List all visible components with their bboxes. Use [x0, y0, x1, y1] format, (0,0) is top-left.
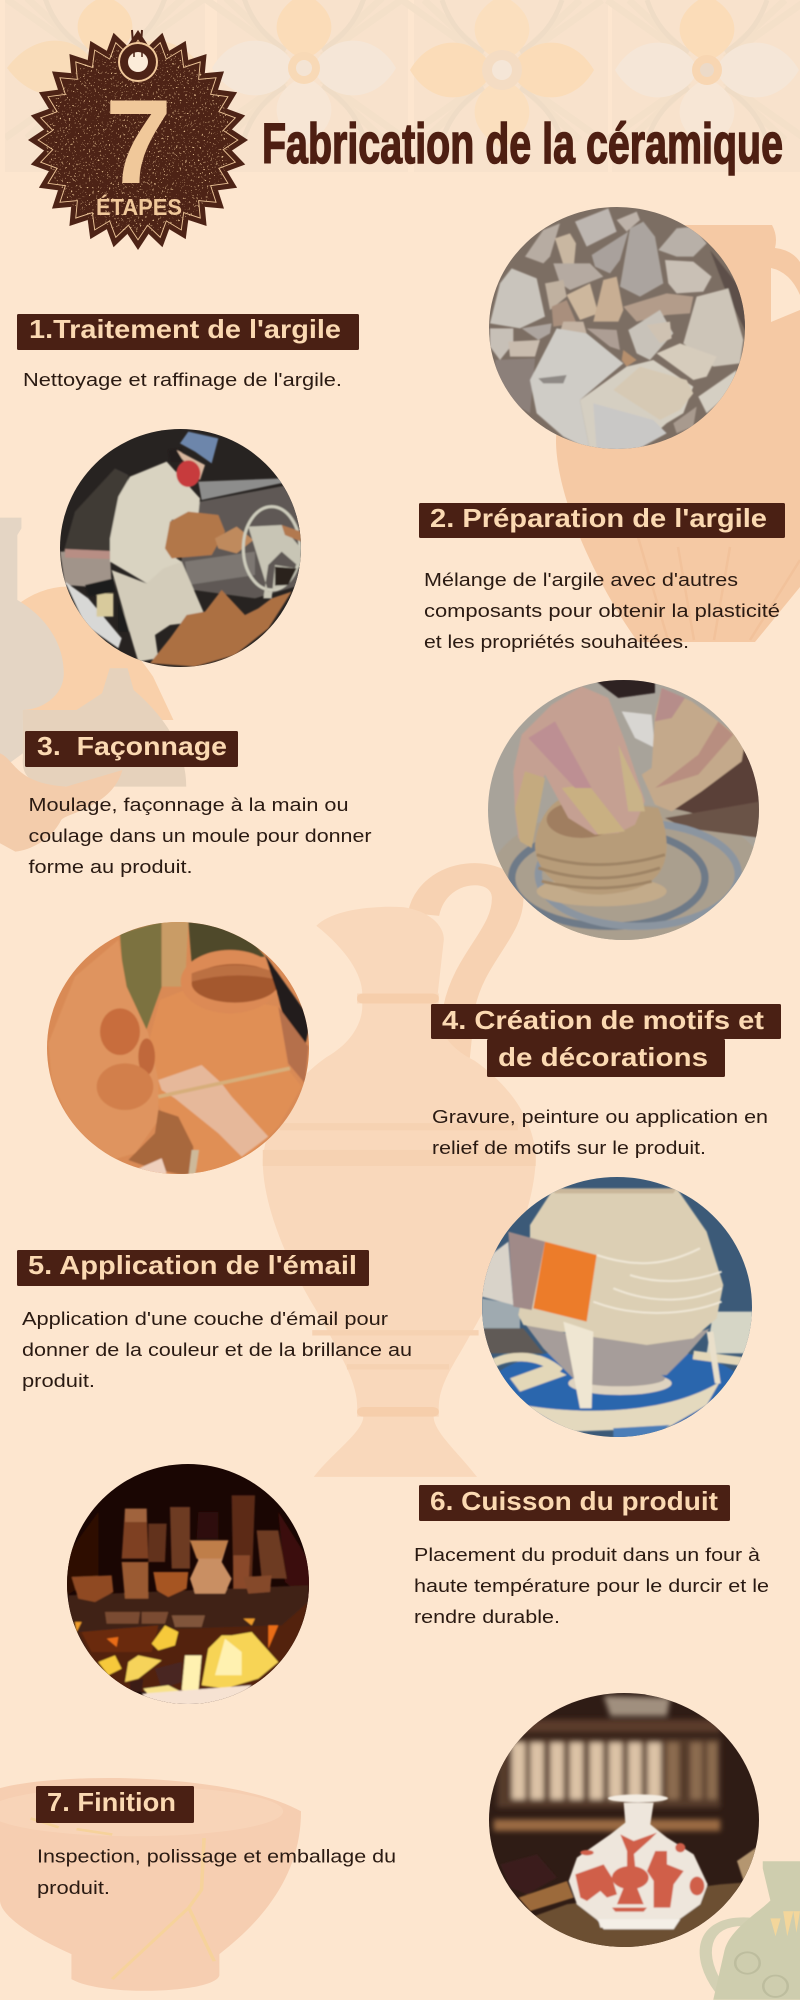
text: step 1: Nettoyage et raffinage de l'argile.	[23, 370, 342, 390]
photo: clay rocks	[489, 207, 745, 449]
badge: 7 étapes	[28, 30, 248, 250]
text: step 3: coulage dans un moule pour donner	[28, 826, 372, 846]
panel: step 3	[25, 731, 372, 1180]
heading: step 3: 3. Façonnage	[37, 731, 227, 761]
text: step 5: Application d'une couche d'émail pour	[22, 1309, 388, 1329]
tile flower 4	[607, 0, 800, 148]
heading: step 4: 4. Création de motifs et	[442, 1005, 764, 1035]
tile flower 3	[402, 0, 602, 148]
text: step 5	[22, 1309, 412, 1391]
heading: step 1	[17, 314, 359, 350]
panel: step 1	[17, 200, 760, 460]
tile flower 2	[204, 0, 404, 146]
text: step 2: Mélange de l'argile avec d'autres	[424, 570, 738, 590]
badge hanging loop	[119, 30, 157, 81]
text: step 6: haute température pour le durcir et le	[414, 1576, 769, 1596]
decorative tile band	[5, 0, 800, 147]
text: step 4	[432, 1107, 768, 1158]
text: step 6: rendre durable.	[414, 1607, 560, 1627]
background silhouette: left bottles	[0, 518, 186, 852]
text: step 7	[37, 1846, 396, 1898]
tile flower 1	[7, 0, 194, 92]
text: step 5: donner de la couleur et de la brillance au	[22, 1340, 412, 1360]
text: step 7: produit.	[37, 1878, 110, 1898]
photo: red and white vase	[489, 1693, 759, 1947]
text: step 6: Placement du produit dans un four à	[414, 1545, 761, 1565]
heading: step 5: 5. Application de l'émail	[28, 1250, 357, 1280]
heading: step 7: 7. Finition	[47, 1787, 176, 1817]
heading: step 3	[25, 731, 238, 767]
text: step 2	[424, 570, 780, 652]
text: step 4: relief de motifs sur le produit.	[432, 1138, 706, 1158]
photo: kiln fire	[60, 1460, 315, 1710]
text: step 2: composants pour obtenir la plasticité	[424, 601, 780, 621]
badge star	[28, 30, 248, 250]
heading: step 6: 6. Cuisson du produit	[430, 1486, 718, 1516]
text: step 2: et les propriétés souhaitées.	[424, 632, 689, 652]
panel: step 7	[36, 1786, 396, 1898]
text: step 7: Inspection, polissage et emballage du	[37, 1846, 396, 1866]
heading: step 1: 1.Traitement de l'argile	[29, 314, 341, 344]
text: step 4: Gravure, peinture ou application en	[432, 1107, 768, 1127]
panel: step 5	[17, 1250, 412, 1710]
text: step 5: produit.	[22, 1371, 95, 1391]
heading: step 5	[17, 1250, 369, 1286]
background silhouette: green jug	[706, 1861, 800, 2000]
panel: step 4	[431, 1004, 781, 1445]
background silhouette: top right jug	[556, 225, 800, 642]
badge grain	[46, 48, 230, 232]
text: step 3: Moulage, façonnage à la main ou	[28, 795, 348, 815]
heading: step 4: de décorations	[498, 1042, 708, 1072]
heading: step 2: 2. Préparation de l'argile	[430, 503, 767, 533]
photo: hands on wheel	[488, 680, 759, 940]
badge label: ÉTAPES	[96, 193, 182, 220]
badge number: 7	[105, 75, 172, 209]
text: step 6	[414, 1545, 769, 1627]
panel: step 1 photo worker	[55, 425, 305, 675]
heading: step 7	[36, 1786, 194, 1823]
panel: step 6	[414, 1485, 769, 1955]
background silhouette: cracked bowl	[0, 1778, 301, 1991]
photo: carving terracotta	[40, 915, 315, 1180]
text: step 3: forme au produit.	[28, 857, 192, 877]
heading: step 4	[431, 1004, 781, 1077]
background silhouette: central ewer	[263, 874, 536, 1477]
text: step 3	[28, 795, 372, 877]
panel: step 2	[419, 503, 785, 958]
photo: glaze brush	[482, 1177, 752, 1437]
